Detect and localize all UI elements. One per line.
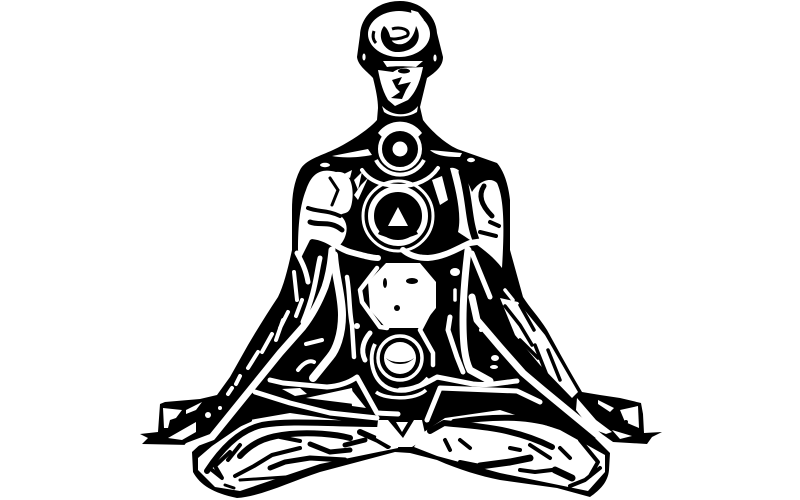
right leg — [414, 410, 605, 491]
left thigh patches — [282, 388, 366, 408]
arm and torso inner lines — [308, 172, 499, 240]
shoulders and upper arms — [298, 149, 503, 268]
right forearm patches — [500, 298, 578, 398]
waist band — [312, 236, 490, 258]
right torso and forearm lines — [400, 244, 614, 447]
chakra: throat — [362, 122, 438, 186]
left leg — [198, 413, 400, 491]
right hand — [576, 398, 639, 439]
chakra: solar plexus — [360, 263, 436, 365]
silhouette: body — [140, 1, 662, 498]
chakra: root — [376, 420, 426, 447]
left torso and forearm lines — [188, 250, 398, 446]
chakra: sacral — [372, 336, 428, 398]
face — [378, 67, 423, 106]
left hand — [163, 402, 222, 440]
chakra: heart — [363, 181, 433, 251]
head details — [362, 10, 437, 116]
